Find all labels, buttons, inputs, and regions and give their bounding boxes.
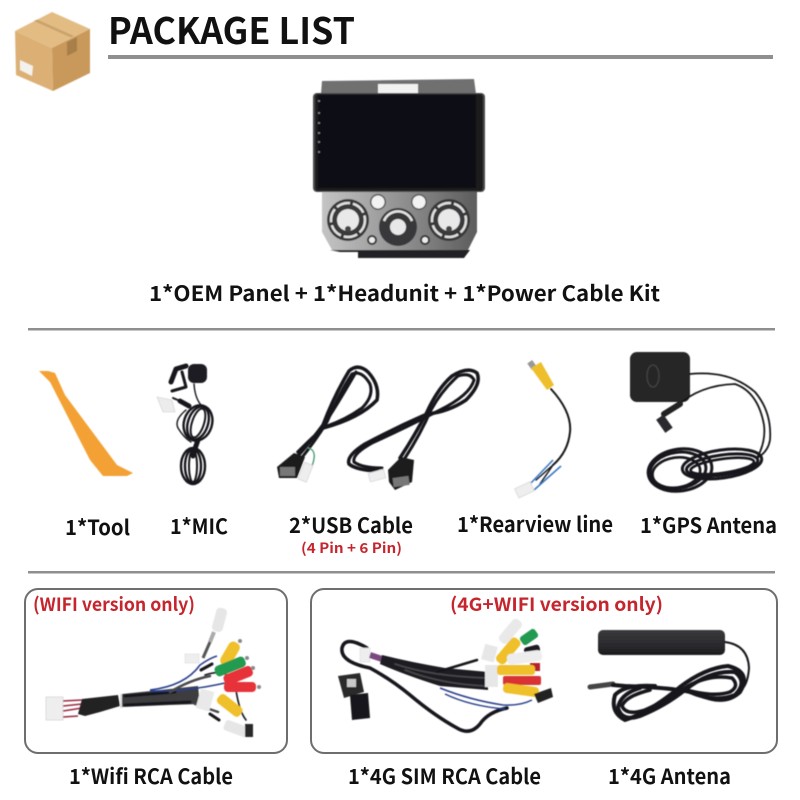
label: mic: 1*MIC bbox=[170, 511, 228, 541]
title: PACKAGE LIST bbox=[108, 2, 355, 55]
item: USB cables bbox=[277, 367, 478, 490]
item: 4G antenna bbox=[590, 630, 749, 720]
label: rearview line: 1*Rearview line bbox=[457, 509, 613, 539]
panel: 4G+WIFI version bbox=[311, 589, 777, 753]
item: WIFI RCA cable bbox=[46, 607, 261, 738]
item: pry tool bbox=[39, 371, 133, 476]
item labels: 1*Tool bbox=[65, 512, 130, 542]
item: 4G SIM RCA cable bbox=[338, 617, 553, 731]
panel: WIFI version bbox=[25, 589, 287, 753]
item: GPS antenna bbox=[630, 352, 770, 495]
icon: cardboard box bbox=[15, 12, 90, 91]
label: 4G antenna: 1*4G Antena bbox=[608, 761, 731, 791]
label: USB cable: 2*USB Cable bbox=[289, 510, 413, 540]
head unit with OEM panel bbox=[313, 79, 485, 258]
label: WIFI RCA cable: 1*Wifi RCA Cable bbox=[69, 761, 233, 791]
item: microphone bbox=[157, 364, 217, 484]
label: GPS antenna: 1*GPS Antena bbox=[640, 510, 777, 540]
caption: headunit kit: 1*OEM Panel + 1*Headunit + 1*Power Cable Kit bbox=[149, 278, 660, 308]
panel heading: 4G+WIFI version only: (4G+WIFI version only) bbox=[450, 591, 663, 617]
label: USB pin note: (4 Pin + 6 Pin) bbox=[301, 538, 402, 558]
panel heading: WIFI version only: (WIFI version only) bbox=[33, 591, 195, 617]
label: 4G SIM RCA cable: 1*4G SIM RCA Cable bbox=[348, 761, 541, 791]
item: rearview line bbox=[515, 360, 570, 498]
